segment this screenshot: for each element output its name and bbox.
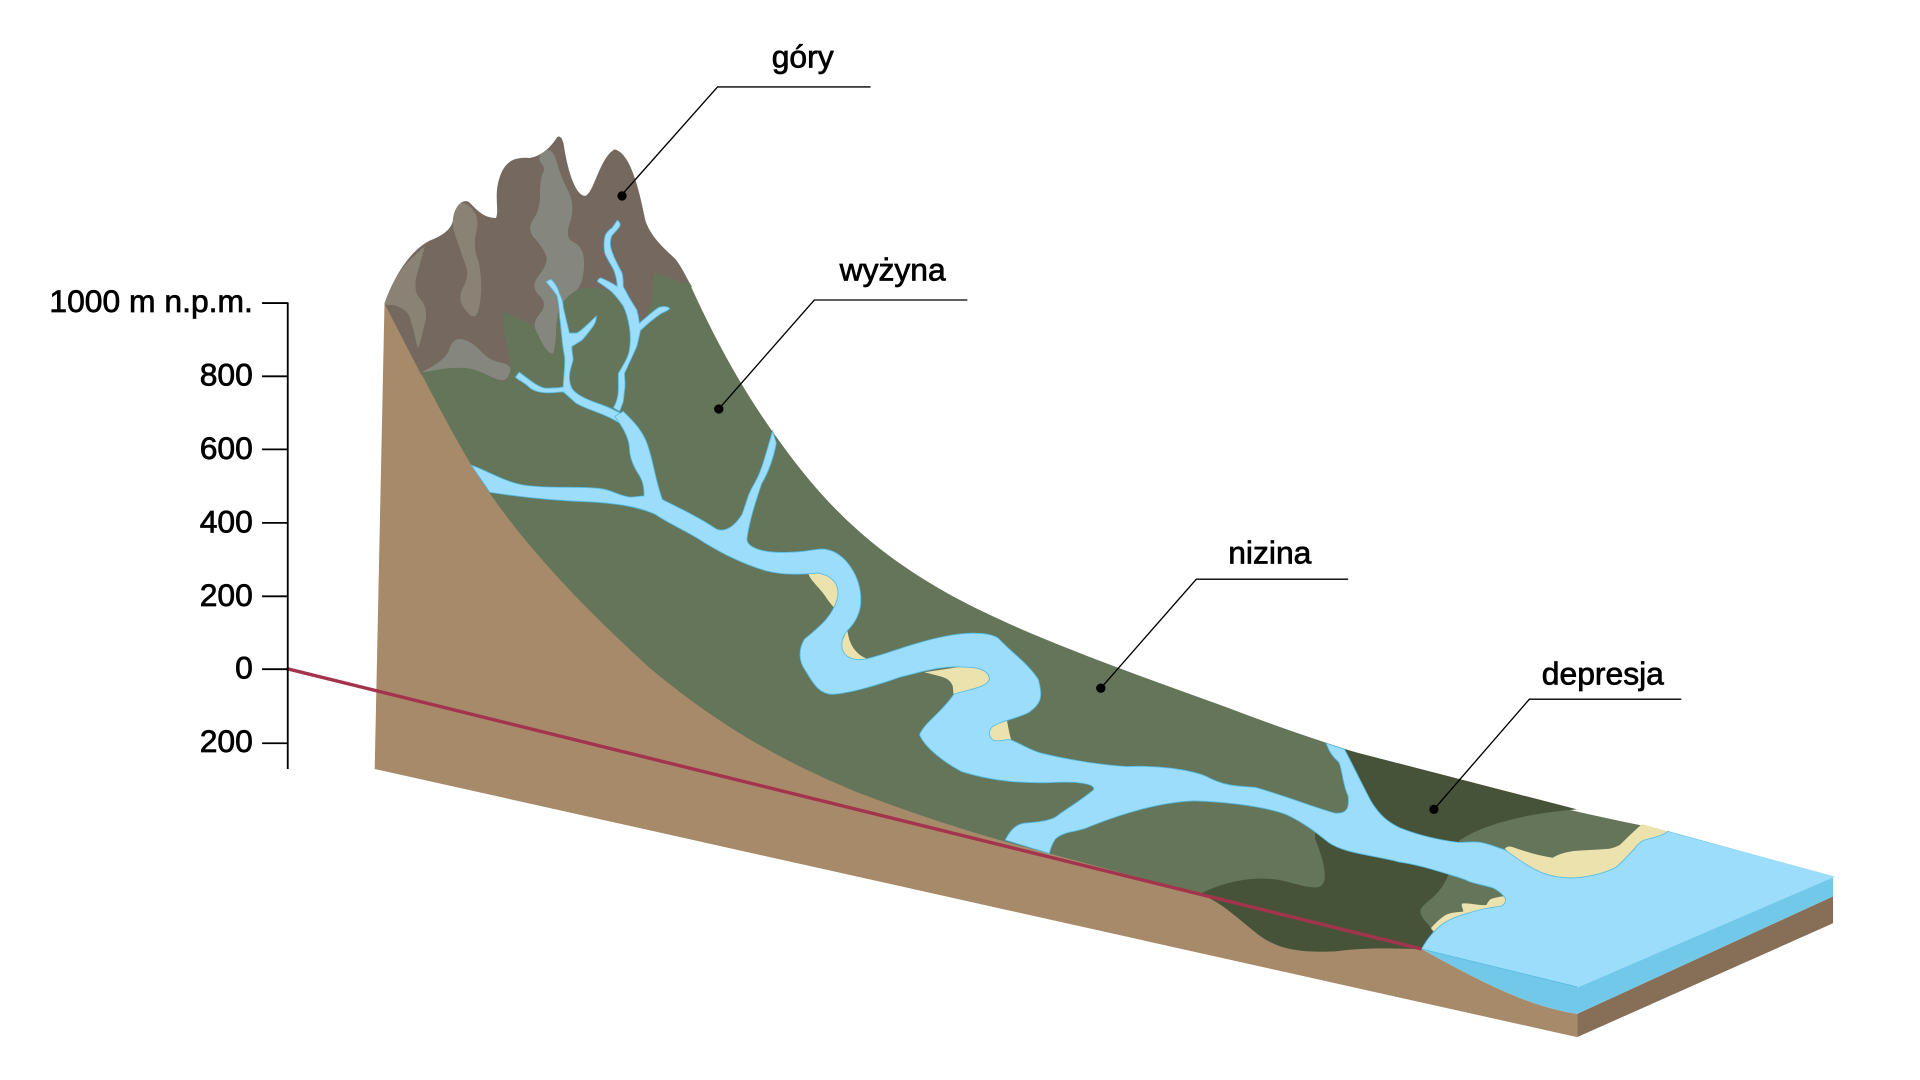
grey rock lower patch <box>421 339 511 380</box>
leader line depresja <box>1434 699 1681 809</box>
leader line nizina <box>1101 579 1348 688</box>
sand bank 4 <box>986 718 1011 743</box>
sea level line <box>287 669 1422 949</box>
label nizina: nizina <box>1228 534 1312 570</box>
taupe rock patch left <box>384 246 426 348</box>
green land surface <box>421 273 1714 980</box>
mountain rock mass <box>384 137 692 392</box>
sea depth side face <box>1422 877 1833 1014</box>
callout: nizina <box>1096 534 1348 693</box>
callout: wyżyna <box>714 251 967 414</box>
callout: góry <box>617 38 871 201</box>
sand banks <box>808 569 1671 933</box>
sand bank 3 <box>924 665 994 698</box>
river system and sea <box>471 220 1833 987</box>
leader line góry <box>621 87 871 196</box>
label 0: 0 <box>235 649 253 685</box>
sand bank 2 <box>839 629 867 664</box>
label 400: 400 <box>200 504 253 540</box>
grey rock central patch <box>530 150 584 354</box>
dark brown right side of the ground <box>1577 896 1833 1037</box>
dot wyżyna <box>714 404 723 414</box>
block: terrain model <box>287 137 1833 1037</box>
delta sand small <box>1431 896 1510 933</box>
mountain tributary left <box>516 279 624 422</box>
dark depression area upper <box>1344 749 1577 847</box>
label wyżyna: wyżyna <box>839 251 946 287</box>
dot nizina <box>1096 684 1105 693</box>
label minus 200: 200 <box>200 723 253 759</box>
dark depression area lower <box>1200 833 1457 952</box>
delta sand large <box>1505 824 1671 884</box>
mountains <box>384 137 692 392</box>
scale axis and ticks <box>262 302 288 769</box>
main river, delta and sea surface <box>471 411 1833 987</box>
leader line wyżyna <box>719 300 967 409</box>
callout: depresja <box>1429 655 1681 814</box>
scale labels <box>49 283 253 759</box>
label góry: góry <box>772 38 834 74</box>
dot depresja <box>1429 805 1439 814</box>
brown front face of the ground <box>375 304 1577 1037</box>
mountain tributary right <box>598 220 670 411</box>
sand bank 1 <box>808 569 845 612</box>
label 600: 600 <box>200 430 253 466</box>
label 1000: 1000 m n.p.m. <box>49 283 253 319</box>
dot góry <box>617 191 627 201</box>
taupe rock patch centre left <box>453 203 481 316</box>
label 200: 200 <box>200 577 253 613</box>
label depresja: depresja <box>1542 655 1664 691</box>
altitude scale <box>49 283 288 769</box>
label 800: 800 <box>200 357 253 393</box>
